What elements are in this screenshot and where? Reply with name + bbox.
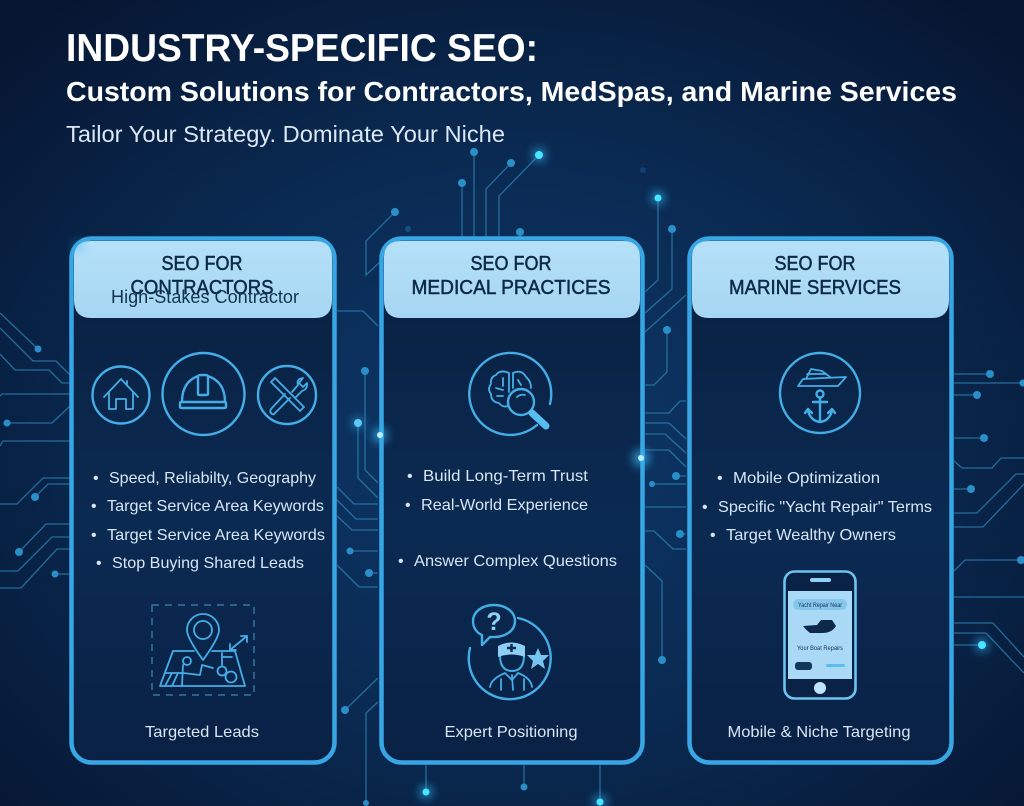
bullet list: contractors: Target Service Area Keywords: [107, 498, 324, 515]
icon: expert with question and star: ?: [486, 608, 502, 636]
bullet list: contractors: Target Service Area Keywords: [107, 527, 325, 544]
header: contractors: CONTRACTORS: [130, 277, 274, 299]
header: contractors: SEO FOR: [162, 253, 242, 275]
bullet list: marine: Mobile Optimization: [733, 470, 880, 487]
header: medical: MEDICAL PRACTICES: [412, 277, 610, 299]
title: INDUSTRY-SPECIFIC SEO:: [66, 27, 538, 70]
header: medical: [384, 241, 640, 318]
icon: hard hat: [162, 353, 244, 435]
icon: smartphone: Your Boat Repairs: [797, 645, 844, 652]
bullet list: medical: Real-World Experience: [421, 497, 588, 514]
caption: mobile and niche targeting: Mobile & Niche Targeting: [728, 724, 910, 741]
panel: medical practices: [382, 238, 642, 762]
bullet list: contractors: •: [96, 555, 102, 572]
header: marine: SEO FOR: [774, 253, 856, 275]
bullet list: marine: •: [710, 527, 716, 544]
bullet list: marine: •: [717, 470, 723, 487]
bullet list: contractors: Speed, Reliabilty, Geography: [109, 470, 316, 487]
header: marine: MARINE SERVICES: [729, 277, 901, 299]
edge glows: [74, 242, 649, 466]
caption: targeted leads: Targeted Leads: [145, 724, 259, 741]
bullet list: medical: •: [407, 468, 413, 485]
tagline: Tailor Your Strategy. Dominate Your Niche: [66, 121, 505, 147]
icon: smartphone: [784, 572, 856, 698]
subtitle: Custom Solutions for Contractors, MedSpas, and Marine Services: [66, 76, 957, 107]
bullet list: medical: •: [398, 553, 404, 570]
header: marine: [692, 241, 949, 318]
icon: expert with question and star: [469, 605, 551, 699]
caption: expert positioning: Expert Positioning: [444, 724, 578, 741]
bullet list: medical: Build Long-Term Trust: [423, 468, 589, 485]
bullet list: marine: [702, 470, 932, 544]
header: contractors: [74, 241, 332, 318]
icon: crossed tools: [258, 366, 316, 424]
bullet list: contractors: [91, 470, 325, 572]
icon: yacht and anchor: [780, 353, 860, 433]
icon: map with pin: [152, 605, 254, 695]
header: contractors: High-Stakes Contractor: [111, 287, 299, 307]
header: medical: SEO FOR: [470, 253, 552, 275]
panel: marine services: [690, 238, 952, 762]
bullet list: contractors: •: [91, 498, 97, 515]
bullet list: contractors: Stop Buying Shared Leads: [112, 555, 304, 572]
icon: brain and magnifier: [469, 353, 551, 435]
bullet list: contractors: •: [91, 527, 97, 544]
icon: house: [92, 366, 150, 424]
bullet list: medical: •: [405, 497, 411, 514]
bullet list: marine: Specific "Yacht Repair" Terms: [718, 499, 932, 516]
bullet list: marine: Target Wealthy Owners: [726, 527, 896, 544]
bullet list: contractors: •: [93, 470, 99, 487]
panel: contractors: [72, 238, 334, 762]
bullet list: medical: Answer Complex Questions: [414, 553, 617, 570]
icon: smartphone: Yacht Repair Near: [798, 603, 842, 609]
bullet list: marine: •: [702, 499, 708, 516]
bullet list: medical: [398, 468, 617, 570]
